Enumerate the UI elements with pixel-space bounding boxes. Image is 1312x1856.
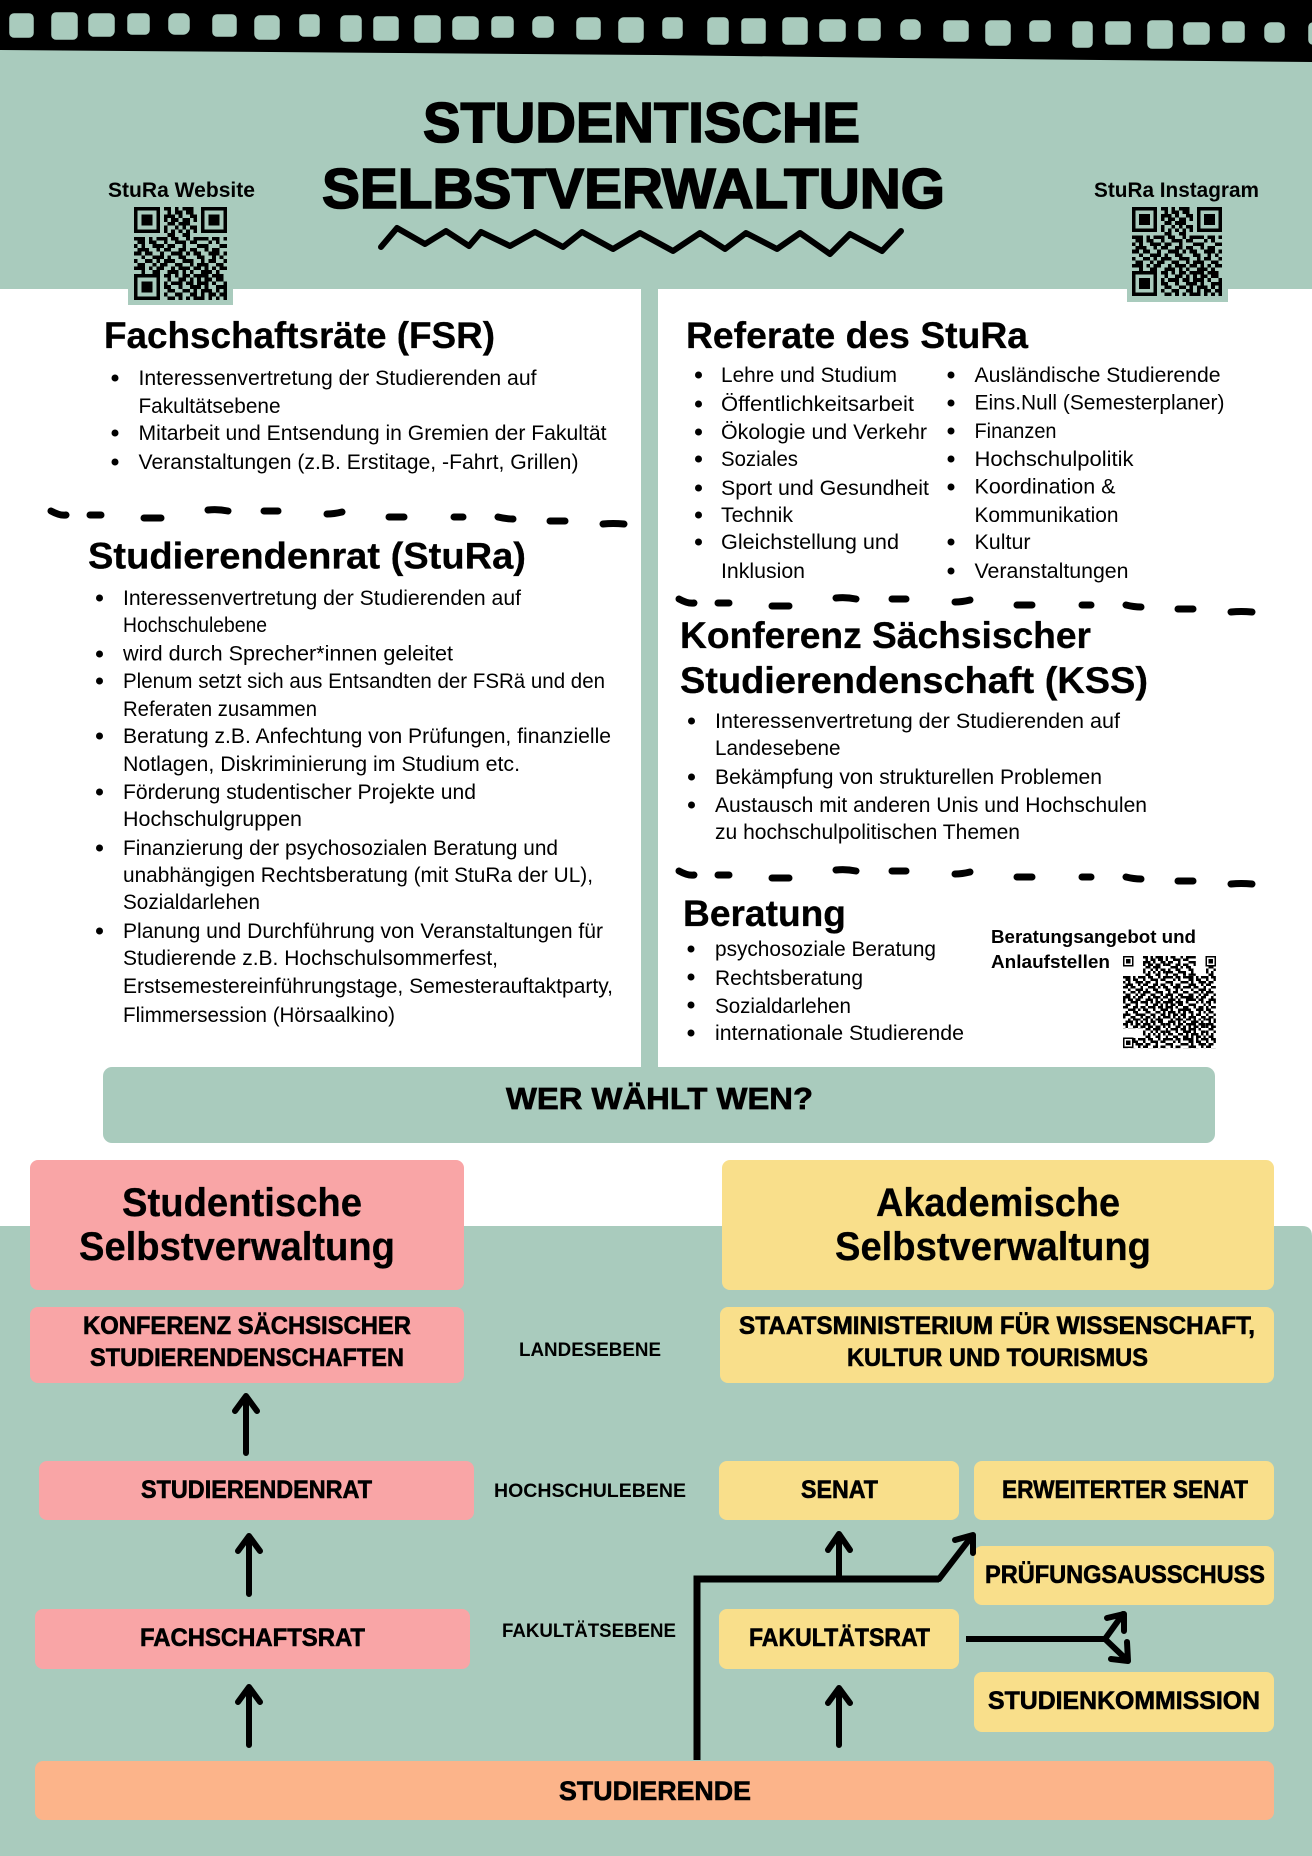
panel: Konferenz Sächsischer Studierendenschaft (680, 615, 1148, 844)
arrow: Fachschaftsrat voters to Fachschaftsrat (238, 1687, 260, 1745)
level label: Landesebene: LANDESEBENE (519, 1340, 661, 1361)
list: StuRa bullets: Hochschulebene (123, 614, 267, 637)
level label: Fakultätsebene: FAKULTÄTSEBENE (502, 1621, 676, 1642)
box: Studienkommission (974, 1672, 1274, 1732)
list: Referate column 2: Koordination & (974, 476, 1116, 498)
list: FSR bullets: Fakultätsebene (138, 395, 280, 418)
Beratung QR label: Anlaufstellen (991, 952, 1110, 972)
list: StuRa bullets: Interessenvertretung der Studierenden auf (123, 587, 521, 610)
box: Fachschaftsrat: FACHSCHAFTSRAT (140, 1624, 365, 1652)
box: Fakultätsrat: FAKULTÄTSRAT (749, 1624, 930, 1652)
list: Referate column 1: Gleichstellung und (721, 531, 899, 554)
box: Erweiterter Senat: ERWEITERTER SENAT (1002, 1476, 1248, 1504)
list: Referate column 1: Öffentlichkeitsarbeit (721, 393, 914, 416)
panel: Studierendenrat (88, 536, 613, 1027)
box: Senat (719, 1461, 959, 1520)
list: StuRa bullets: Plenum setzt sich aus Entsandten der FSRä und den (123, 670, 605, 693)
list: Referate column 1 (695, 364, 929, 583)
box: Senat: SENAT (801, 1476, 878, 1504)
list: Referate column 1: Inklusion (721, 560, 805, 583)
list: Referate column 1: Sport und Gesundheit (721, 477, 929, 500)
website QR backing (128, 204, 233, 305)
box: Studentische Selbstverwaltung (30, 1160, 464, 1290)
title: STUDENTISCHE (423, 91, 860, 155)
box: Fakultätsrat (719, 1609, 959, 1669)
list: Referate column 2 (948, 364, 1224, 583)
box: Konferenz Sächsischer Studierendenschaften: STUDIERENDENSCHAFTEN (90, 1344, 404, 1372)
title: SELBSTVERWALTUNG (322, 157, 945, 221)
instagram QR block (1094, 179, 1259, 302)
arrow: Studierendenrat to KSS (235, 1396, 257, 1453)
list: StuRa bullets: Flimmersession (Hörsaalkino) (123, 1004, 395, 1027)
title squiggle underline (381, 228, 901, 254)
list: Referate column 1: Soziales (721, 448, 798, 471)
panel: Fachschaftsräte (104, 315, 607, 474)
heading: Studierendenrat: Studierendenrat (StuRa) (88, 536, 526, 576)
center column divider (641, 289, 658, 1079)
box: Akademische Selbstverwaltung: Akademische (876, 1181, 1120, 1225)
box: Konferenz Sächsischer Studierendenschaften (30, 1307, 464, 1383)
list: KSS bullets: zu hochschulpolitischen Themen (715, 821, 1020, 844)
banner: Wer wählt wen: WER WÄHLT WEN? (506, 1081, 813, 1116)
box: Akademische Selbstverwaltung: Selbstverwaltung (835, 1225, 1151, 1269)
list: StuRa bullets: Notlagen, Diskriminierung im Studium etc. (123, 753, 520, 776)
list: Referate column 1: Technik (721, 504, 794, 527)
list: KSS bullets: Bekämpfung von strukturellen Problemen (715, 766, 1102, 789)
heading: Fachschaftsräte: Fachschaftsräte (FSR) (104, 315, 495, 356)
website QR code (134, 207, 227, 300)
box: Fachschaftsrat (35, 1609, 470, 1669)
heading: Beratung: Beratung (683, 893, 846, 934)
list: Beratung bullets: psychosoziale Beratung (715, 938, 936, 961)
Beratung QR code (1123, 956, 1216, 1048)
list: Referate column 2: Veranstaltungen (974, 560, 1128, 583)
box: Erweiterter Senat (974, 1461, 1274, 1520)
list: Referate column 2: Finanzen (974, 420, 1056, 443)
list: Referate column 2: Kommunikation (974, 504, 1118, 527)
box: Prüfungsausschuss: PRÜFUNGSAUSSCHUSS (985, 1560, 1265, 1589)
film strip border (0, 0, 1312, 62)
list: Referate column 1: Lehre und Studium (721, 364, 897, 387)
list: KSS bullets (688, 710, 1147, 844)
box: Studentische Selbstverwaltung: Selbstverwaltung (79, 1225, 395, 1269)
list: KSS bullets: Austausch mit anderen Unis und Hochschulen (715, 794, 1147, 817)
box: Studierende (35, 1761, 1274, 1820)
list: StuRa bullets: Studierende z.B. Hochschulsommerfest, (123, 947, 498, 970)
list: StuRa bullets: Förderung studentischer Projekte und (123, 781, 476, 804)
list: StuRa bullets: Beratung z.B. Anfechtung von Prüfungen, finanzielle (123, 725, 611, 748)
list: Beratung bullets: Sozialdarlehen (715, 995, 851, 1018)
arrow: Studierende to Senat and Erweiterter Senat (697, 1534, 973, 1760)
list: StuRa bullets (96, 587, 613, 1027)
box: Konferenz Sächsischer Studierendenschaften: KONFERENZ SÄCHSISCHER (83, 1312, 411, 1340)
panel: Beratung (685, 900, 1216, 1048)
list: FSR bullets (112, 367, 607, 474)
list: StuRa bullets: Sozialdarlehen (123, 891, 260, 914)
list: StuRa bullets: Hochschulgruppen (123, 808, 302, 831)
box: Studierendenrat: STUDIERENDENRAT (141, 1476, 372, 1504)
list: StuRa bullets: Planung und Durchführung von Veranstaltungen für (123, 920, 603, 943)
website label: StuRa Website (108, 179, 255, 202)
arrow: Fachschaftsrat to Studierendenrat (238, 1536, 260, 1594)
title (322, 91, 945, 221)
arrow: Studierende to Fakultätsrat (828, 1688, 850, 1745)
instagram QR backing (1127, 204, 1228, 302)
list: Referate column 2: Kultur (974, 531, 1031, 554)
box: Staatsministerium: STAATSMINISTERIUM FÜR WISSENSCHAFT, (739, 1311, 1255, 1340)
Beratung QR label (991, 927, 1196, 972)
list: KSS bullets: Interessenvertretung der Studierenden auf (715, 710, 1120, 733)
list: StuRa bullets: Referaten zusammen (123, 698, 317, 721)
list: Referate column 2: Eins.Null (Semesterplaner) (974, 392, 1224, 414)
box: Studentische Selbstverwaltung: Studentische (122, 1181, 362, 1225)
Beratung QR label: Beratungsangebot und (991, 927, 1196, 947)
box: Studierende: STUDIERENDE (559, 1776, 751, 1806)
instagram label: StuRa Instagram (1094, 179, 1259, 202)
arrow: Fakultätsrat to Prüfungsausschuss and Studienkommission (966, 1614, 1128, 1661)
box: Prüfungsausschuss (974, 1546, 1274, 1605)
heading: KSS (680, 615, 1148, 701)
list: Referate column 1: Ökologie und Verkehr (721, 421, 927, 444)
list: Beratung bullets: Rechtsberatung (715, 967, 863, 990)
list: Referate column 2: Ausländische Studierende (974, 364, 1220, 387)
list: StuRa bullets: unabhängigen Rechtsberatung (mit StuRa der UL), (123, 864, 593, 887)
list: Beratung bullets: internationale Studierende (715, 1022, 964, 1045)
list: StuRa bullets: wird durch Sprecher*innen geleitet (122, 642, 453, 666)
box: Akademische Selbstverwaltung (722, 1160, 1274, 1290)
list: FSR bullets: Mitarbeit und Entsendung in Gremien der Fakultät (138, 422, 607, 445)
heading: KSS: Konferenz Sächsischer (680, 615, 1091, 656)
box: Staatsministerium (720, 1307, 1274, 1383)
header background (0, 0, 1312, 289)
banner: Wer wählt wen (103, 1067, 1215, 1143)
website QR block (108, 179, 255, 305)
list: FSR bullets: Veranstaltungen (z.B. Erstitage, -Fahrt, Grillen) (138, 451, 578, 474)
list: FSR bullets: Interessenvertretung der Studierenden auf (138, 367, 537, 390)
list: KSS bullets: Landesebene (715, 737, 840, 760)
list: Referate column 2: Hochschulpolitik (974, 448, 1134, 471)
heading: KSS: Studierendenschaft (KSS) (680, 660, 1148, 701)
list: StuRa bullets: Erstsemestereinführungstage, Semesterauftaktparty, (123, 975, 613, 998)
heading: Referate: Referate des StuRa (686, 315, 1028, 356)
list: StuRa bullets: Finanzierung der psychosozialen Beratung und (123, 837, 558, 860)
instagram QR code (1132, 207, 1222, 296)
list: Beratung bullets (688, 938, 964, 1045)
box: Studienkommission: STUDIENKOMMISSION (988, 1687, 1260, 1715)
level label: Hochschulebene: HOCHSCHULEBENE (494, 1481, 686, 1502)
panel: Referate des StuRa (686, 315, 1224, 583)
box: Studierendenrat (39, 1461, 474, 1520)
lower green background panel (0, 1226, 1312, 1856)
box: Staatsministerium: KULTUR UND TOURISMUS (847, 1344, 1148, 1372)
